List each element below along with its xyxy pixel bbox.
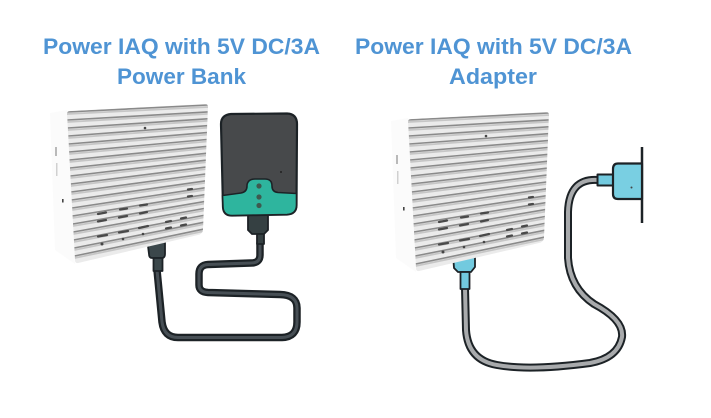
adapter body	[613, 164, 642, 199]
title: adapter	[355, 34, 632, 89]
cable: adapter to device	[465, 180, 622, 368]
power bank body	[221, 114, 297, 216]
title: power bank	[43, 34, 320, 89]
title: adapter: Adapter	[449, 64, 537, 89]
indicator lights	[256, 183, 262, 208]
power bank	[221, 114, 297, 244]
power bank plug	[248, 213, 268, 244]
device plug	[147, 238, 165, 271]
device body	[50, 100, 215, 270]
device body	[391, 108, 556, 278]
illustration: IAQ device with adapter	[391, 108, 642, 368]
cable: power bank to device	[157, 243, 297, 338]
title: power bank: Power Bank	[117, 64, 247, 89]
illustration: IAQ device with power bank	[50, 100, 297, 338]
title: power bank: Power IAQ with 5V DC/3A	[43, 34, 320, 59]
adapter neck	[598, 174, 614, 186]
wall adapter	[598, 147, 642, 223]
wall plate	[641, 147, 643, 223]
device plug	[453, 255, 475, 289]
title: adapter: Power IAQ with 5V DC/3A	[355, 34, 632, 59]
power bank teal band	[222, 179, 296, 216]
